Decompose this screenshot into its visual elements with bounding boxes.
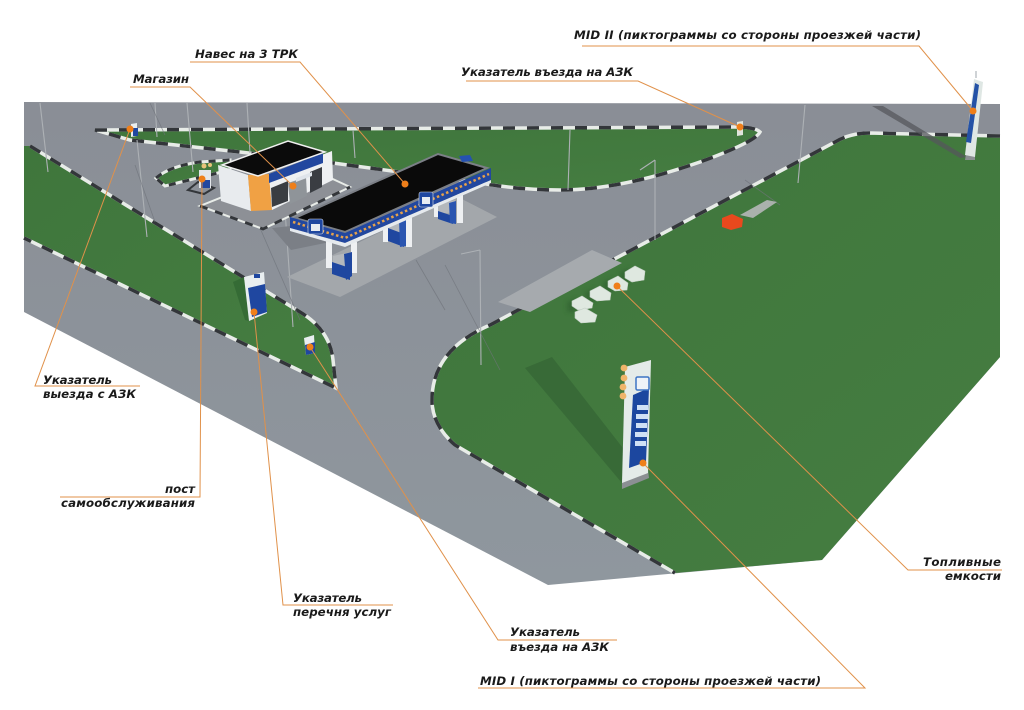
MID I shadow — [525, 357, 640, 483]
building: shop — [218, 141, 333, 211]
light poles — [40, 103, 805, 370]
self-service post — [188, 163, 214, 194]
canopy logos — [308, 192, 433, 234]
shop platform — [200, 174, 350, 229]
lawn: right side — [432, 133, 1000, 573]
label: Указатель перечня услуг — [250, 308, 393, 619]
tank bodies — [572, 266, 645, 323]
exit sign small — [131, 123, 138, 137]
label: пост самообслуживания — [60, 176, 206, 510]
asphalt ground — [24, 102, 1000, 585]
MID I pylon — [620, 360, 651, 489]
label: Магазин — [130, 72, 296, 190]
entry sign top — [737, 121, 743, 136]
label: Навес на 3 ТРК — [190, 47, 408, 188]
label: Указатель въезда на АЗК (top) — [461, 65, 744, 130]
label: Указатель въезда на АЗК (bottom): въезда на АЗК — [510, 640, 610, 654]
tank shadows — [567, 268, 630, 312]
label: Топливные емкости — [614, 282, 1002, 583]
blue rooftop unit — [459, 155, 473, 162]
price panel — [629, 388, 649, 468]
label: Топливные емкости: Топливные — [923, 555, 1001, 569]
fuel tanks — [567, 266, 645, 323]
canopy shadow — [272, 225, 330, 250]
label: Указатель выезда с АЗК — [35, 126, 140, 401]
service sign — [233, 272, 267, 321]
label: Навес на 3 ТРК: Навес на 3 ТРК — [195, 47, 299, 61]
label: Указатель выезда с АЗК: выезда с АЗК — [43, 387, 137, 401]
lawn: left strip — [24, 146, 336, 388]
label: MID II — [574, 28, 976, 114]
label: пост самообслуживания: самообслуживания — [61, 496, 195, 510]
lane-marking hatch — [498, 250, 622, 312]
blue fascia band — [269, 153, 323, 183]
orange lights on fascia — [293, 174, 489, 238]
lawn: top island — [95, 127, 760, 190]
fuel pumps — [332, 200, 456, 280]
label: Указатель перечня услуг: перечня услуг — [293, 605, 392, 619]
label: Магазин: Магазин — [133, 72, 189, 86]
label: пост самообслуживания: пост — [165, 482, 196, 496]
label: Указатель перечня услуг: Указатель — [293, 591, 362, 605]
pictogram balls — [620, 365, 627, 399]
utility slab — [740, 200, 777, 218]
label: MID I: MID I (пиктограммы со стороны проезжей части) — [480, 674, 821, 688]
black roof — [222, 141, 325, 176]
canopy with pumps — [290, 154, 491, 280]
label: Указатель выезда с АЗК: Указатель — [43, 373, 112, 387]
fuel island paving — [287, 196, 497, 297]
label: Указатель въезда на АЗК (top): Указатель въезда на АЗК — [461, 65, 634, 79]
canopy blue fascia — [290, 168, 491, 243]
shop windows and door — [271, 167, 322, 207]
pylon logo — [636, 377, 649, 390]
label: Указатель въезда на АЗК (bottom) — [306, 344, 617, 654]
lawn: small island near shop — [156, 160, 230, 186]
canopy columns — [326, 192, 463, 273]
label: MID II: MID II (пиктограммы со стороны проезжей части) — [574, 28, 921, 42]
price digits — [635, 405, 648, 446]
MID II shadow — [872, 106, 967, 158]
canopy black roof — [295, 154, 487, 232]
red utility box — [722, 214, 743, 230]
MID II pylon — [965, 71, 983, 160]
label: Топливные емкости: емкости — [945, 569, 1001, 583]
label: Указатель въезда на АЗК (bottom): Указатель — [510, 625, 580, 639]
orange corner wall — [248, 174, 272, 211]
label: MID I — [478, 460, 865, 688]
entry sign small — [304, 335, 315, 355]
